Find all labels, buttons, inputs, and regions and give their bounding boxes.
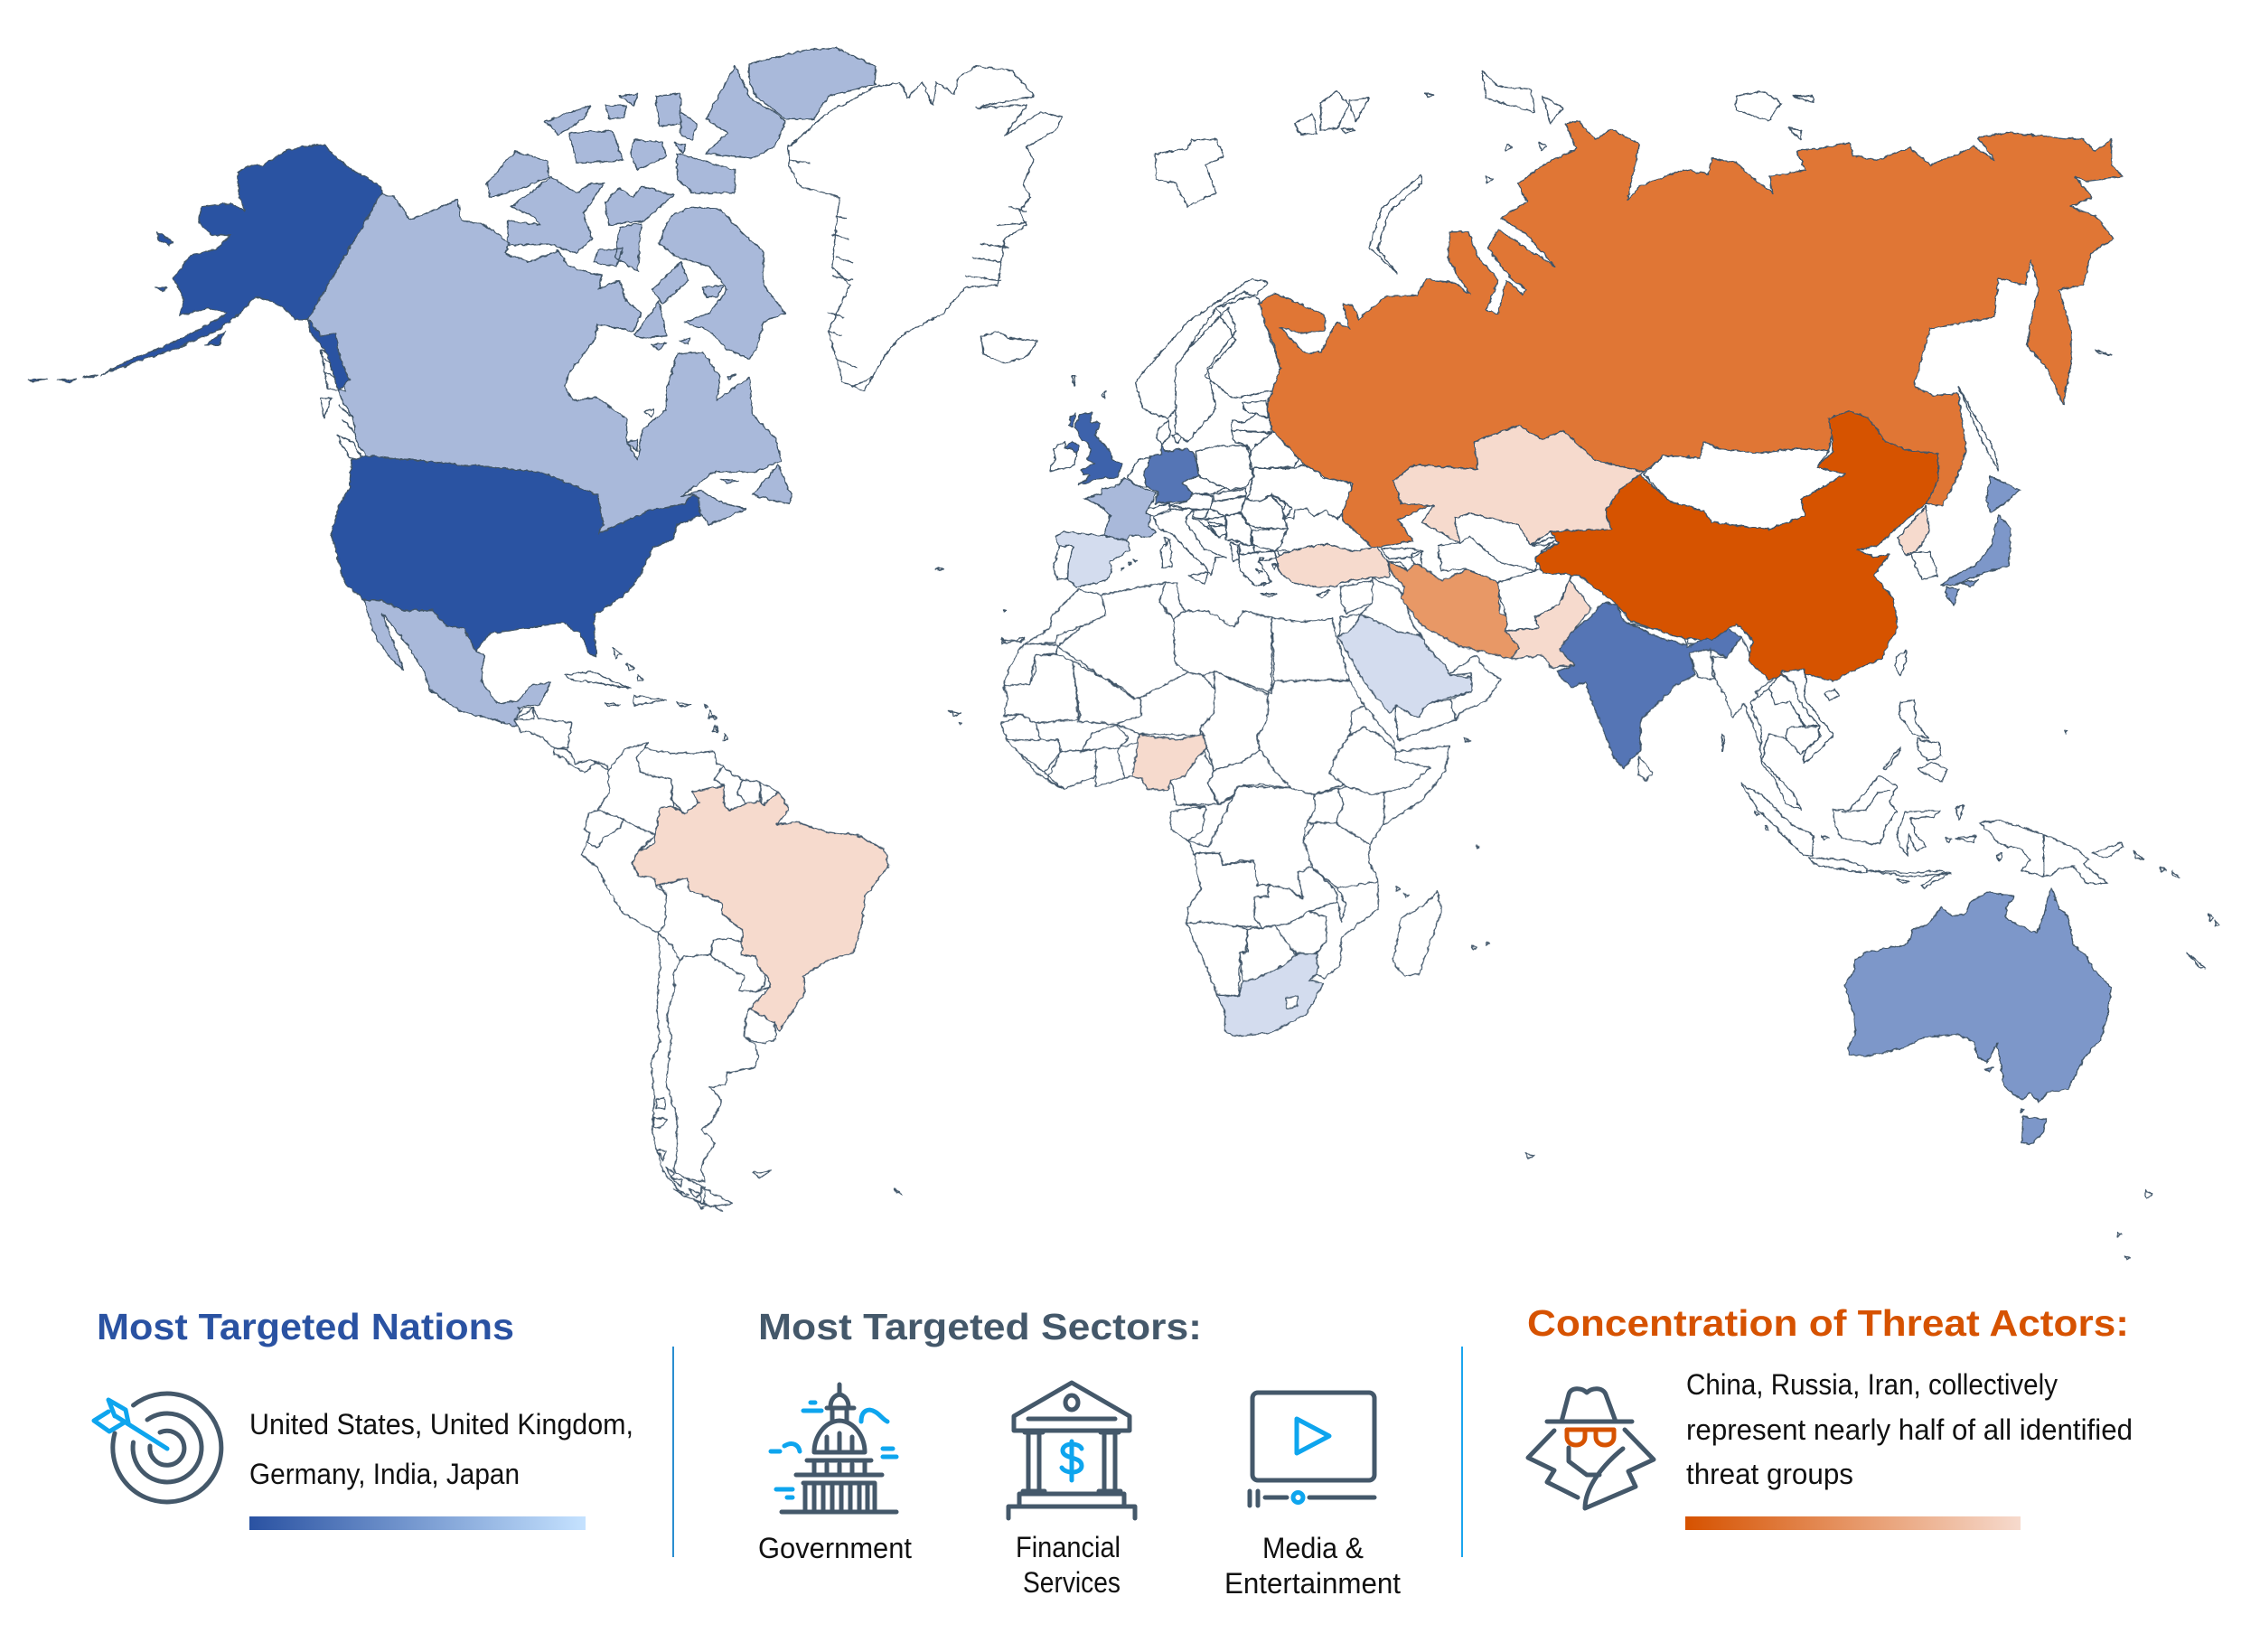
country: Saudi Arabia [1338, 614, 1471, 718]
country: United Kingdom [1065, 413, 1122, 485]
country: Brazil [632, 785, 889, 1031]
southeast asian countries and islands [1722, 650, 2219, 1260]
legend bar: orange gradient [1685, 1516, 2021, 1530]
country: Iran [1387, 560, 1519, 659]
heading: most targeted sectors: Most Targeted Sectors: [758, 1306, 1202, 1347]
region: europe [1003, 377, 1423, 612]
label: financial services: Services [1023, 1566, 1121, 1599]
country: South Korea [1909, 552, 1938, 580]
text: nations list: Germany, India, Japan [249, 1458, 520, 1490]
country: Germany [1145, 445, 1199, 503]
country: France [1084, 477, 1157, 540]
icon: media and entertainment screen [1250, 1393, 1374, 1506]
country: Alaska [29, 145, 382, 391]
country: Canada [308, 48, 876, 534]
south american countries [582, 705, 962, 1210]
country: China [1534, 411, 1938, 681]
panel: concentration of threat actors [1527, 1302, 2133, 1530]
heading: most targeted nations: Most Targeted Nations [97, 1306, 514, 1347]
region: southeast asia and oceania [1722, 650, 2219, 1260]
arabian peninsula and levant [1338, 578, 1501, 740]
country: Mongolia [1644, 442, 1845, 530]
country: Japan [1942, 476, 2021, 605]
european countries [1003, 377, 1423, 612]
country: United States [332, 455, 700, 656]
panel: most targeted sectors [758, 1306, 1401, 1600]
arctic islands and scandinavia [1135, 70, 2112, 472]
country: India [1557, 603, 1741, 768]
text: nations list [249, 1408, 633, 1490]
text: threat groups description: represent nearly half of all identified [1686, 1413, 2133, 1446]
south asian neighbours [1629, 623, 1773, 748]
icon: spy in hat and trench coat [1528, 1389, 1654, 1508]
central asian countries [1438, 513, 1611, 631]
divider right [1461, 1347, 1463, 1557]
divider left [672, 1347, 674, 1557]
heading: concentration of threat actors: Concentration of Threat Actors: [1527, 1302, 2129, 1344]
country: Turkey [1276, 544, 1390, 587]
region: russia and asia [1135, 70, 2122, 681]
label: media and entertainment: Media & [1262, 1532, 1364, 1564]
label: government: Government [758, 1532, 912, 1564]
country: Kazakhstan [1393, 426, 1644, 546]
text: threat groups description [1686, 1368, 2133, 1490]
country: Nigeria [1132, 734, 1207, 791]
icon: financial services bank [1008, 1383, 1135, 1518]
text: threat groups description: China, Russia, Iran, collectively [1686, 1368, 2058, 1401]
country: North Korea [1898, 506, 1930, 555]
country: Iceland [981, 332, 1037, 363]
african countries [1000, 583, 1652, 1159]
region: north america [29, 48, 1063, 741]
country: South Africa [1217, 953, 1324, 1037]
small pacific coast islands [321, 350, 654, 463]
country: Australia [1845, 887, 2111, 1145]
country: Russia [1259, 121, 2122, 548]
icon: government capitol [771, 1384, 896, 1512]
country: Greenland [789, 66, 1063, 391]
label: financial services: Financial [1016, 1531, 1121, 1563]
label: media and entertainment [1224, 1532, 1401, 1600]
country: Pakistan [1505, 578, 1591, 667]
caribbean islands [566, 568, 1025, 741]
text: nations list: United States, United Kingdom, [249, 1408, 633, 1441]
region: central and south america [514, 705, 962, 1210]
country: Mexico [364, 599, 551, 727]
label: financial services [1016, 1531, 1121, 1599]
text: threat groups description: threat groups [1686, 1458, 1853, 1490]
icon: target with arrow [94, 1394, 221, 1502]
label: media and entertainment: Entertainment [1224, 1567, 1401, 1600]
region: africa middle east and india [1000, 560, 1773, 1159]
legend bar: blue gradient [249, 1516, 586, 1530]
world map [29, 48, 2219, 1260]
central america [514, 709, 607, 773]
country: Spain [1055, 531, 1130, 587]
panel: most targeted nations [94, 1306, 633, 1530]
